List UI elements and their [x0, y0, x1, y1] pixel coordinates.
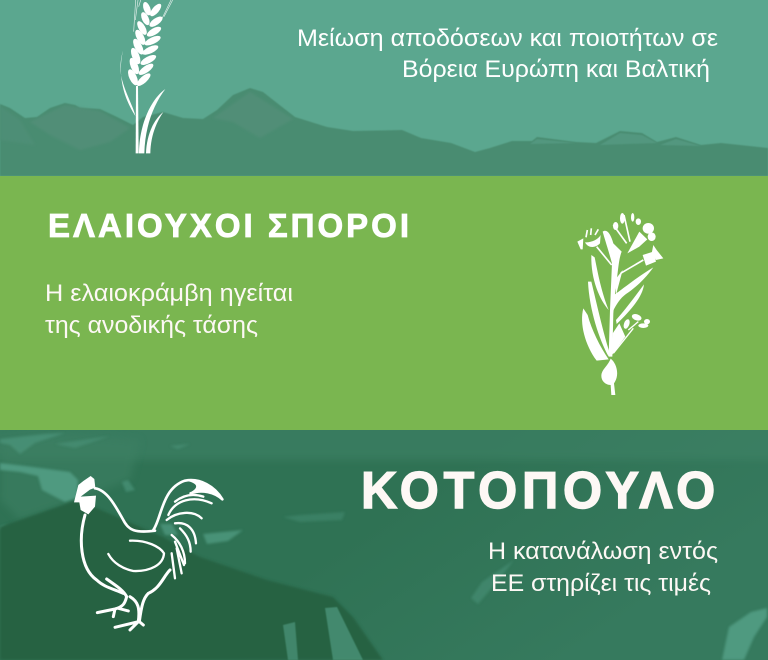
text: chicken description: Η κατανάλωση εντός [488, 538, 718, 565]
text: grain description [297, 25, 718, 83]
panel: grain section [0, 0, 768, 176]
panel: chicken section [0, 420, 768, 660]
text: oilseeds description: Η ελαιοκράμβη ηγείται [45, 280, 293, 307]
icon: wheat [120, 0, 173, 153]
icon: rooster [74, 476, 223, 630]
text: oilseeds description [45, 280, 293, 339]
icon: rapeseed plant [577, 213, 663, 395]
mountain range [0, 88, 768, 176]
text: oilseeds description: της ανοδικής τάσης [45, 312, 258, 339]
text: grain description: Βόρεια Ευρώπη και Βαλτική [402, 56, 710, 83]
rooster comb and head [74, 476, 96, 514]
forested landscape [0, 420, 768, 660]
text: grain description: Μείωση αποδόσεων και ποιοτήτων σε [297, 25, 718, 52]
panel: oilseeds section [0, 176, 768, 430]
text: chicken description: ΕΕ στηρίζει τις τιμές [491, 570, 711, 597]
heading: oilseeds: ΕΛΑΙΟΥΧΟΙ ΣΠΟΡΟΙ [48, 207, 412, 244]
heading: chicken: ΚΟΤΟΠΟΥΛΟ [361, 462, 720, 520]
text: chicken description [488, 538, 718, 597]
